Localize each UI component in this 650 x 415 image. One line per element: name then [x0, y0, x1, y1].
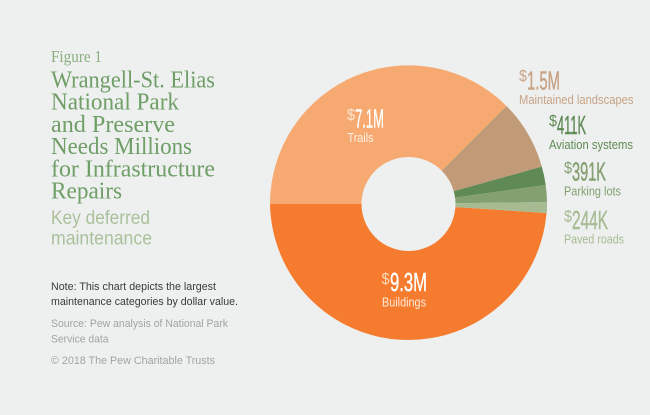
segment: buildings	[270, 204, 546, 340]
note: maintenance categories by dollar value.	[51, 296, 238, 308]
label: maintained landscapes: 1.5M	[527, 66, 560, 96]
title: National Park	[51, 90, 179, 116]
donut hole	[362, 157, 456, 251]
label: parking lots	[564, 156, 621, 198]
segment: maintained landscapes	[408, 106, 542, 204]
label: aviation systems: Aviation systems	[549, 138, 633, 152]
label: trails: Trails	[348, 131, 374, 145]
label: maintained landscapes: $	[519, 68, 527, 85]
label: parking lots: 391K	[572, 156, 606, 186]
source	[51, 318, 228, 346]
label: paved roads: 244K	[572, 205, 608, 235]
title	[51, 68, 215, 204]
figure label: Figure 1	[51, 47, 102, 66]
label: trails: $	[347, 107, 355, 124]
label: buildings	[382, 267, 427, 310]
label: buildings: $	[382, 271, 390, 288]
note	[51, 281, 238, 308]
subtitle: maintenance	[51, 228, 152, 250]
title: and Preserve	[51, 112, 175, 138]
label: buildings: Buildings	[382, 296, 426, 310]
label: trails	[347, 104, 384, 145]
label: paved roads: $	[564, 208, 572, 226]
copyright: © 2018 The Pew Charitable Trusts	[51, 355, 215, 367]
label: aviation systems: $	[549, 113, 557, 130]
title: Needs Millions	[51, 134, 192, 160]
label: parking lots: $	[564, 160, 572, 177]
label: aviation systems: 411K	[557, 110, 586, 140]
label: paved roads	[564, 205, 624, 246]
title: Wrangell-St. Elias	[51, 68, 215, 94]
segment: aviation systems	[408, 167, 546, 204]
subtitle: Key deferred	[51, 208, 150, 229]
label: trails: 7.1M	[355, 104, 384, 134]
segment: trails	[270, 65, 506, 204]
donut chart	[270, 65, 547, 340]
subtitle	[51, 208, 152, 250]
label: maintained landscapes	[519, 66, 634, 107]
title: for Infrastructure	[51, 156, 215, 182]
source: Service data	[51, 334, 109, 346]
label: parking lots: Parking lots	[564, 184, 621, 198]
source: Source: Pew analysis of National Park	[51, 318, 228, 330]
segment: parking lots	[408, 185, 547, 204]
label: buildings: 9.3M	[390, 267, 427, 297]
segment: paved roads	[408, 202, 547, 213]
title: Repairs	[51, 178, 122, 204]
note: Note: This chart depicts the largest	[51, 281, 216, 293]
label: paved roads: Paved roads	[564, 232, 624, 246]
label: maintained landscapes: Maintained landscapes	[519, 93, 634, 107]
label: aviation systems	[549, 110, 633, 152]
